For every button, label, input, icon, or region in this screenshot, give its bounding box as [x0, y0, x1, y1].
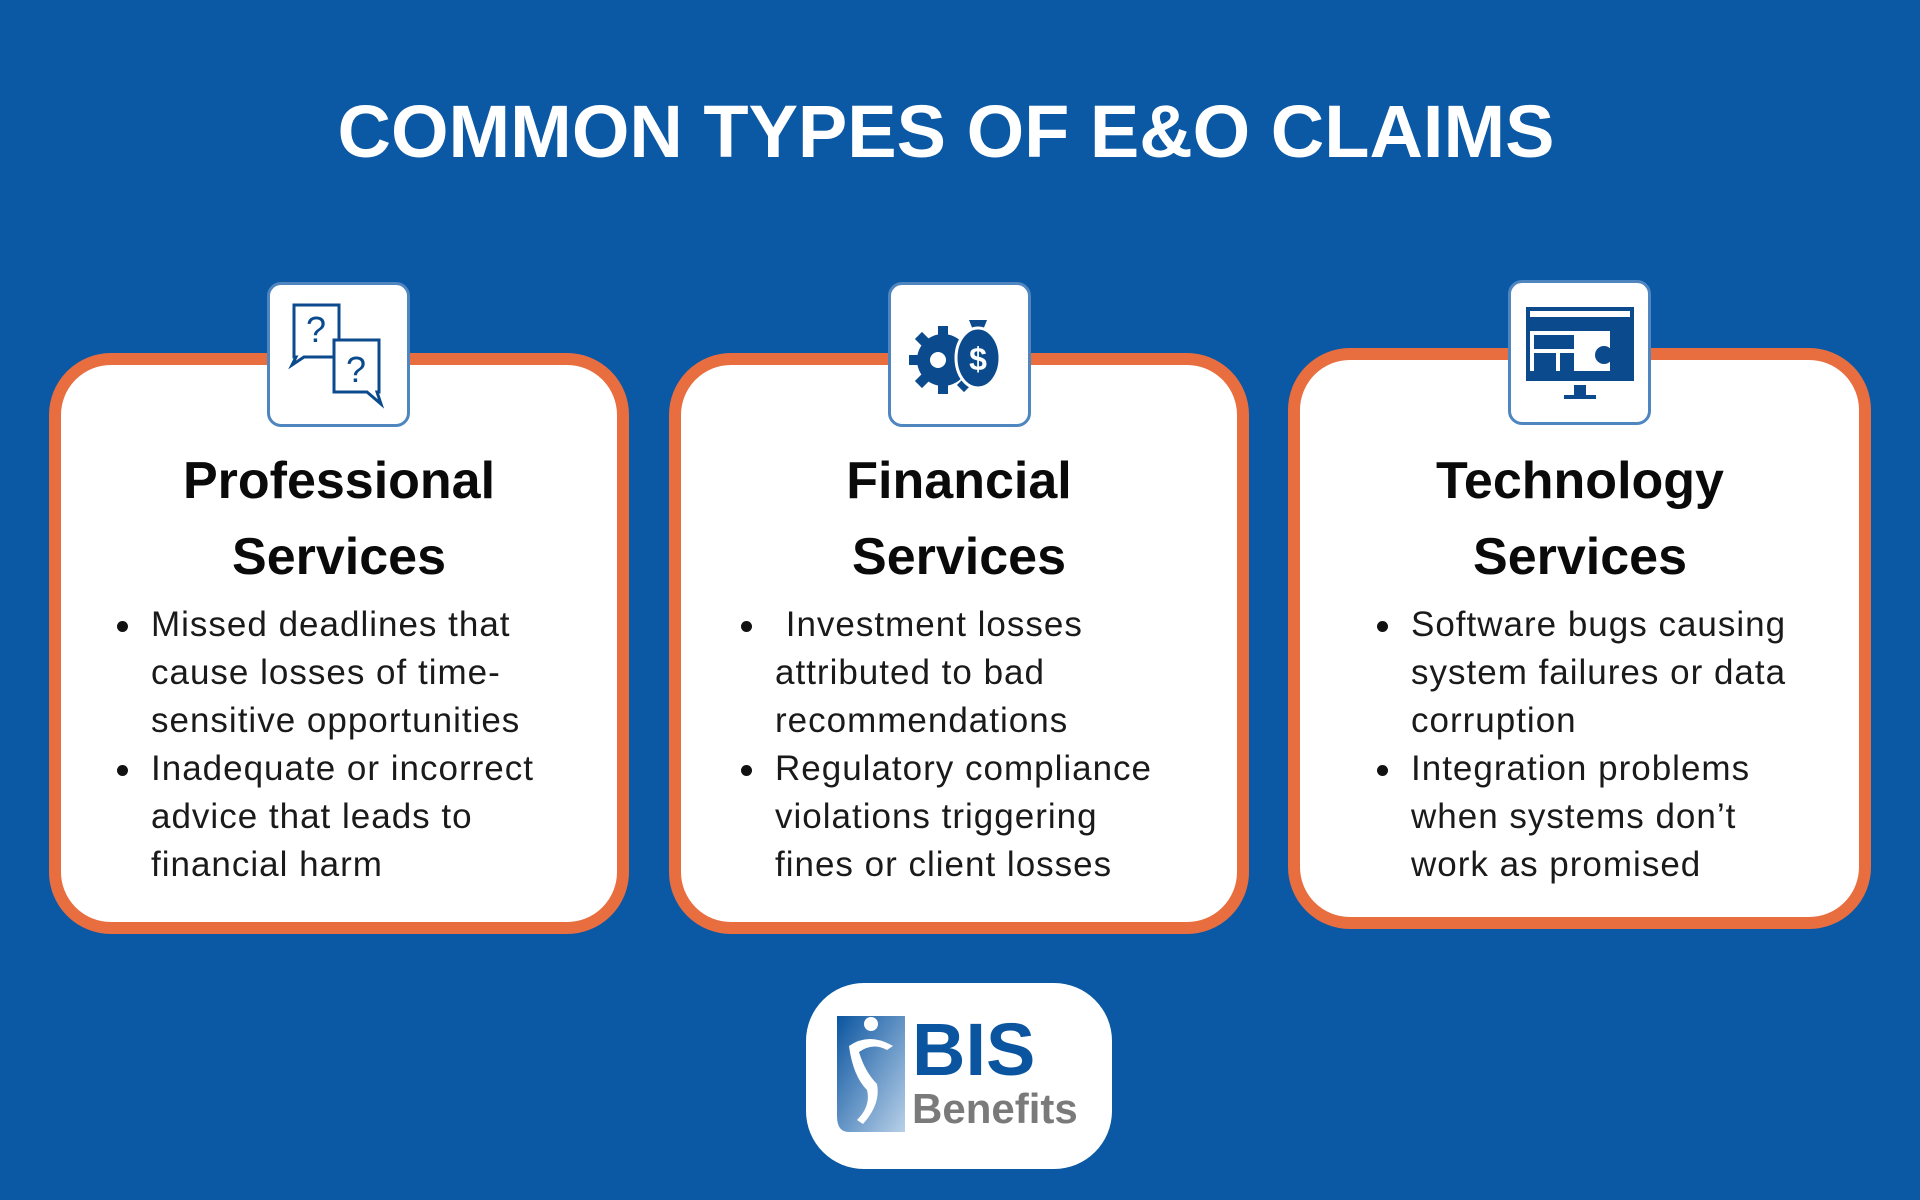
- bullet list: professional: [117, 605, 534, 884]
- icon: gear and money bag: $: [969, 340, 987, 376]
- bullet list: technology: [1377, 605, 1786, 884]
- icon: gear and money bag: [888, 282, 1031, 427]
- bullet list: financial: fines or client losses: [775, 845, 1112, 884]
- bullet list: technology: Integration problems: [1411, 749, 1750, 788]
- bullet list: professional: sensitive opportunities: [151, 701, 520, 740]
- heading: technology: [1436, 452, 1724, 586]
- bullet list: professional: financial harm: [151, 845, 383, 884]
- bullet list: professional: Inadequate or incorrect: [151, 749, 534, 788]
- bullet list: technology: work as promised: [1411, 845, 1701, 884]
- bullet list: financial: recommendations: [775, 701, 1068, 740]
- bullet list: professional: cause losses of time-: [151, 653, 501, 692]
- bullet list: financial: Investment losses: [786, 605, 1083, 644]
- icon: question bubbles: [267, 282, 410, 427]
- logo: BIS Benefits: Benefits: [912, 1085, 1078, 1132]
- logo text: BIS: [912, 1008, 1035, 1091]
- bullet list: financial: attributed to bad: [775, 653, 1045, 692]
- heading: financial: Financial: [846, 452, 1072, 510]
- panel: technology services: [1288, 348, 1871, 929]
- bullet list: technology: system failures or data: [1411, 653, 1786, 692]
- icon: question bubbles: ?: [306, 308, 326, 350]
- icon: question bubbles: ?: [346, 348, 366, 390]
- bullet list: financial: [741, 605, 1152, 884]
- bullet list: technology: when systems don’t: [1411, 797, 1736, 836]
- heading: financial: Services: [852, 528, 1066, 586]
- bullet list: professional: Missed deadlines that: [151, 605, 511, 644]
- bullet list: technology: corruption: [1411, 701, 1577, 740]
- heading: technology: Technology: [1436, 452, 1724, 510]
- heading: professional: Professional: [183, 452, 495, 510]
- panel: financial services: [669, 353, 1249, 934]
- heading: professional: [183, 452, 495, 586]
- icon: computer monitor: [1508, 280, 1651, 425]
- heading: technology: Services: [1473, 528, 1687, 586]
- heading: professional: Services: [232, 528, 446, 586]
- bullet list: professional: advice that leads to: [151, 797, 473, 836]
- panel: professional services: [49, 353, 629, 934]
- bullet list: technology: Software bugs causing: [1411, 605, 1786, 644]
- bullet list: financial: violations triggering: [775, 797, 1098, 836]
- logo mark: runner shield: [837, 1016, 905, 1132]
- bullet list: financial: Regulatory compliance: [775, 749, 1152, 788]
- logo: BIS Benefits: [806, 983, 1112, 1169]
- heading: financial: [846, 452, 1072, 586]
- title: COMMON TYPES OF E&O CLAIMS: [338, 90, 1554, 173]
